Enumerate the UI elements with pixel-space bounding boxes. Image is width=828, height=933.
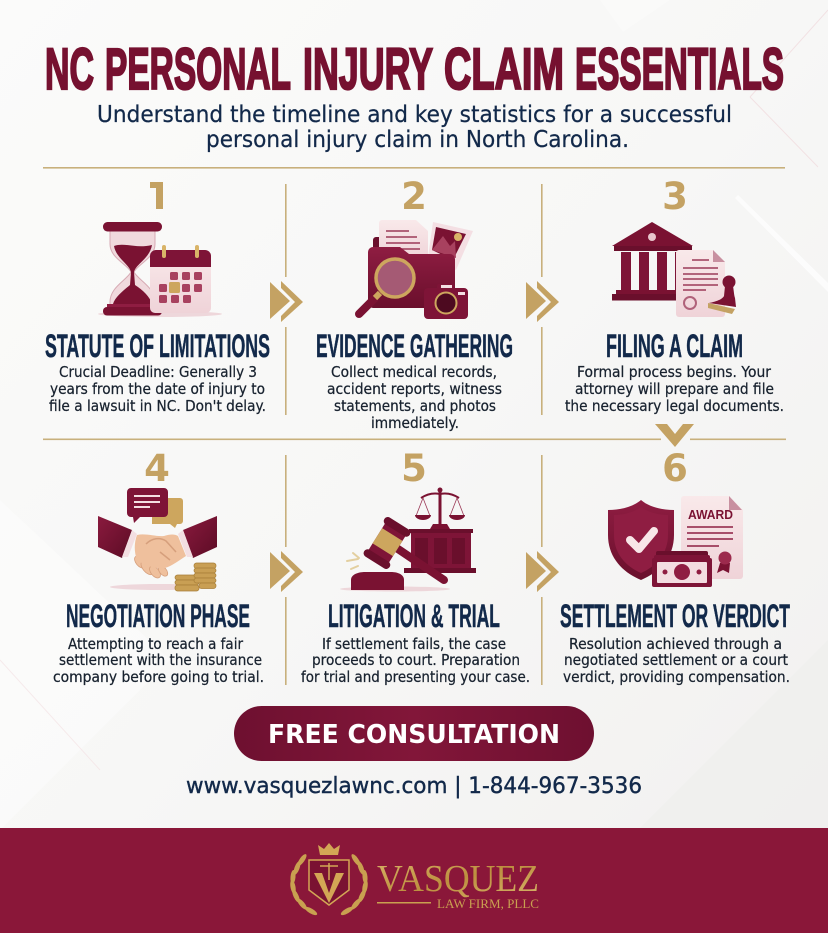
icon: handshake, chat bubbles and coins: [98, 488, 217, 591]
arrow: step 1 to 2: [270, 281, 303, 322]
number 5: 5: [401, 447, 427, 490]
body text: Collect medical records,: [331, 363, 497, 381]
arrow: step 4 to 5: [270, 551, 303, 592]
body text: immediately.: [371, 414, 459, 432]
title: NC: [45, 37, 94, 102]
panel: step 1 statute of limitations: [45, 182, 270, 415]
title: INJURY: [303, 37, 433, 102]
panel: step 4 negotiation phase: [53, 447, 264, 686]
body text: Resolution achieved through a: [569, 635, 782, 653]
icon: gavel, scales and podium: [340, 488, 476, 592]
arrow: step 3 down to 4: [655, 424, 694, 447]
icon: shield, award and money: AWARD: [688, 508, 733, 522]
subtitle: Understand the timeline and key statistics for a successful: [97, 102, 732, 128]
title: PERSONAL: [105, 37, 291, 102]
body text: the necessary legal documents.: [565, 397, 784, 415]
body text: [301, 635, 530, 686]
logo emblem: crown, laurel and shield: [289, 843, 369, 917]
body text: Attempting to reach a fair: [68, 635, 244, 653]
body text: file a lawsuit in NC. Don't delay.: [49, 397, 266, 415]
heading: STATUTE OF LIMITATIONS: [45, 328, 270, 364]
number 4: 4: [144, 447, 170, 490]
body text: [565, 363, 784, 415]
contact line: www.vasquezlawnc.com | 1-844-967-3536: [186, 774, 642, 799]
body text: accident reports, witness: [327, 380, 502, 398]
arrow: step 2 to 3: [526, 281, 559, 322]
heading: NEGOTIATION PHASE: [66, 598, 250, 634]
icon: hourglass and calendar: [98, 222, 222, 317]
heading: EVIDENCE GATHERING: [316, 328, 513, 364]
number 1: [150, 182, 163, 209]
title: CLAIM: [444, 37, 564, 102]
call to action button: FREE CONSULTATION: [268, 720, 560, 750]
number 6: 6: [662, 447, 688, 490]
subtitle: personal injury claim in North Carolina.: [206, 127, 629, 153]
logo wordmark: VASQUEZ: [377, 858, 539, 900]
body text: company before going to trial.: [53, 668, 264, 686]
logo: [289, 843, 539, 917]
body text: [563, 635, 790, 686]
arrow: step 5 to 6: [526, 551, 559, 592]
body text: [49, 363, 266, 415]
body text: proceeds to court. Preparation: [312, 651, 520, 669]
body text: Formal process begins. Your: [577, 363, 772, 381]
icon: courthouse, document and stamp: [612, 222, 736, 317]
body text: If settlement fails, the case: [322, 635, 506, 653]
panel: step 3 filing a claim: [565, 175, 784, 415]
body text: [53, 635, 264, 686]
number 3: 3: [662, 175, 688, 218]
panel: step 5 litigation and trial: [301, 447, 530, 686]
panel: step 6 settlement or verdict: [560, 447, 790, 686]
icon: shield, award and money: [608, 496, 743, 587]
body text: for trial and presenting your case.: [301, 668, 530, 686]
heading: LITIGATION & TRIAL: [328, 598, 500, 634]
number 2: 2: [401, 175, 427, 218]
body text: settlement with the insurance: [59, 651, 262, 669]
body text: [327, 363, 502, 432]
body text: attorney will prepare and file: [575, 380, 774, 398]
body text: verdict, providing compensation.: [563, 668, 790, 686]
body text: statements, and photos: [334, 397, 496, 415]
body text: years from the date of injury to: [50, 380, 265, 398]
logo subtitle: LAW FIRM, PLLC: [437, 896, 539, 911]
footer band: [0, 828, 828, 933]
body text: Crucial Deadline: Generally 3: [59, 363, 257, 381]
panel: step 2 evidence gathering: [316, 175, 513, 432]
subtitle: [97, 102, 732, 153]
call to action button: [234, 706, 594, 761]
dividers and vertical rules: [43, 167, 786, 685]
icon: folder, magnifier and camera: [359, 220, 473, 319]
body text: negotiated settlement or a court: [564, 651, 788, 669]
title: [45, 37, 784, 102]
